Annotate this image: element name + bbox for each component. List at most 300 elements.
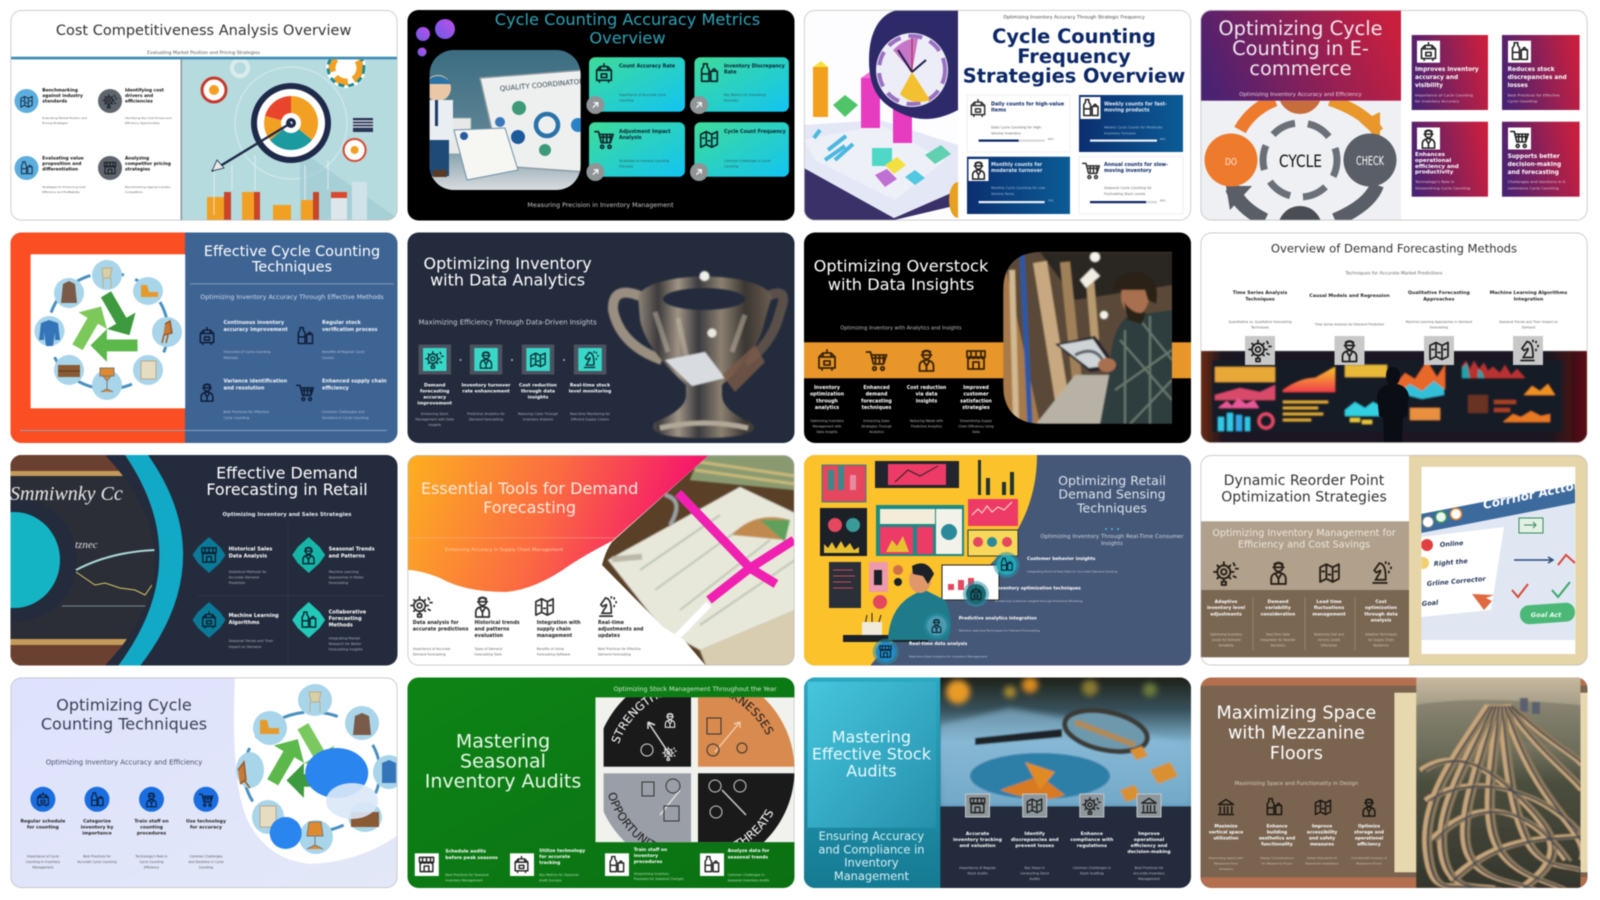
tool: real-time adjustments: Best Practices for Effective	[598, 647, 641, 651]
tool: real-time adjustments: Demand Forecasting	[598, 652, 631, 656]
title: Cycle Counting Accuracy Metrics	[495, 10, 760, 29]
cycle diagram	[1201, 100, 1401, 220]
card: Optimizing Overstock with Data Insights	[804, 232, 1192, 444]
method: causal models	[1309, 293, 1390, 365]
image: quality coordinator	[424, 50, 585, 190]
card: Optimizing Retail Demand Sensing Techniques	[804, 455, 1192, 666]
column: improve efficiency: decision-making	[1127, 849, 1171, 855]
step: demand forecasting accuracy: accuracy	[423, 394, 446, 400]
step: cost reduction: insights	[528, 394, 549, 400]
tool: real-time adjustments: updates	[598, 633, 620, 639]
method: machine learning: Machine Learning Algorithms	[1490, 291, 1567, 296]
column: accurate tracking: and valuation	[959, 843, 996, 849]
item: historical sales: Accurate Demand	[229, 576, 259, 580]
step: categorize inventory: inventory by	[81, 824, 113, 830]
item: machine learning: Impact on Demand	[229, 645, 261, 649]
tool: historical trends: Forecasting Tools	[474, 652, 502, 656]
brown block with columns: Decisions	[1271, 644, 1286, 648]
tile: count accuracy rate	[586, 57, 685, 114]
item: value proposition: Efficiency and Profitability	[42, 190, 80, 194]
brown block with columns: optimization	[1365, 605, 1397, 611]
title: Optimizing Cycle	[56, 696, 192, 715]
column: customer satisfaction	[958, 351, 994, 434]
title block	[1200, 10, 1401, 101]
brown block with columns: Variability	[1218, 644, 1234, 648]
tool: data analysis	[411, 597, 469, 656]
audit step: training: Streamlining Inventory	[634, 872, 669, 876]
column: accessibility: Safety Standards for	[1307, 856, 1337, 860]
title: Cycle Counting	[992, 25, 1156, 48]
step: inventory turnover: rate enhancement	[462, 388, 511, 394]
beige panel with corrective action UI: Online	[1439, 539, 1464, 549]
title: Dynamic Reorder Point	[1224, 473, 1384, 489]
method: time series: Quantitative vs. Qualitative Forecasting	[1228, 320, 1292, 324]
column: demand forecasting	[861, 352, 892, 434]
audit step: technology: tracking	[539, 860, 560, 866]
tile: adjustment impact analysis: Strategies to Improve Counting	[619, 159, 669, 163]
title block: Optimizing Inventory Accuracy and Efficiency	[1239, 92, 1363, 98]
step: stock monitoring: Real-time Monitoring for	[570, 412, 610, 416]
item: collaborative forecasting: Integrating Market	[329, 636, 360, 640]
item: value proposition: proposition and	[42, 161, 81, 167]
step: demand forecasting accuracy: Demand	[424, 384, 445, 388]
column: building aesthetics: Design Considerations	[1260, 856, 1294, 860]
brown block with columns: through data	[1364, 611, 1398, 617]
SWOT diagram: OPPORTUNITIES	[608, 792, 656, 843]
beige panel with corrective action UI: Right the	[1433, 557, 1469, 568]
column: enhance compliance: regulations	[1077, 843, 1107, 849]
step: train staff: counting	[140, 824, 163, 830]
item: variance identification: Variance identification	[224, 378, 287, 384]
tile: annual counts	[1079, 157, 1183, 214]
tile: weekly counts: moving products	[1104, 108, 1150, 114]
item: inventory optimization: Inventory optimization techniques	[995, 585, 1081, 591]
column: improve efficiency: efficiency and	[1131, 843, 1167, 849]
title: Forecasting in Retail	[206, 480, 368, 499]
tile: weekly counts: Weekly Cycle Counts for Moderate	[1104, 126, 1162, 130]
recycling ring illustration	[234, 677, 405, 864]
item: inventory optimization	[963, 581, 1083, 607]
item: cost drivers: Identifying Key Cost Drivers and	[125, 116, 172, 120]
brown block with columns: Levels for Demand	[1211, 638, 1241, 642]
tile: annual counts: Fluctuating Stock Levels	[1104, 192, 1146, 196]
item: collaborative forecasting: Forecasting	[329, 616, 362, 622]
tool: integration: Forecasting Software	[537, 652, 570, 656]
card: Maximizing Space with Mezzanine Floors	[1200, 677, 1588, 889]
tool: data analysis: Importance of Accurate	[413, 647, 450, 651]
column: demand forecasting: forecasting	[861, 398, 892, 404]
column: cost reduction: insights	[916, 398, 937, 404]
item: seasonal trends: Forecasting	[329, 581, 348, 585]
audit step: analysis: Seasonal Inventory Audits	[728, 879, 770, 883]
column: accessibility	[1305, 800, 1339, 866]
item: historical sales: Historical Sales	[229, 546, 272, 552]
item: stock verification: Regular stock	[322, 320, 361, 326]
tile: supports better decision-making: and forecasting	[1508, 170, 1559, 176]
tile: daily counts: Daily Cycle Counting for High-	[991, 126, 1042, 130]
tile: supports better decision-making: Challenges and Solutions in E-	[1508, 179, 1567, 184]
audit step: analysis: Analyze data for	[728, 849, 769, 854]
audit step: schedule	[415, 848, 498, 883]
column: storage efficiency: Mezzanine Floors	[1356, 862, 1382, 866]
step: regular schedule: Counting in Inventory	[26, 860, 60, 864]
item: predictive analytics: Predictive analytics integration	[959, 616, 1037, 622]
item: benchmarking: Benchmarking	[42, 88, 78, 94]
title: Inventory Audits	[425, 770, 581, 792]
column: demand forecasting: Analytics	[869, 430, 884, 434]
item: customer behavior: Customer behavior insights	[1027, 556, 1096, 562]
audit step: technology: Utilize technology	[539, 849, 585, 854]
title: Strategies Overview	[963, 64, 1185, 88]
method: time series: Techniques	[1250, 325, 1269, 329]
brown block with columns: Service Levels	[1318, 638, 1340, 642]
step: stock monitoring: level monitoring	[569, 388, 611, 394]
column: storage efficiency	[1351, 799, 1388, 866]
brown block with columns: adjustments	[1210, 611, 1242, 617]
tan block: Optimizing Inventory Management for	[1212, 528, 1396, 539]
subtitle: Evaluating Market Position and Pricing Strategies	[147, 50, 261, 56]
pink X	[678, 493, 794, 600]
cycle diagram: DO	[1225, 157, 1237, 168]
step: stock monitoring: Real-time stock	[570, 384, 610, 388]
subtitle: Insights	[1101, 541, 1123, 547]
step: train staff	[134, 787, 169, 870]
card: Dynamic Reorder Point Optimization Strategies	[1200, 455, 1589, 666]
item: variance identification: and resolution	[224, 385, 265, 391]
tile: inventory discrepancy rate: Key Metrics for Evaluating	[724, 93, 766, 97]
audit step: schedule: Inventory Management	[445, 879, 483, 883]
tile: adjustment impact analysis: Adjustment Impact	[619, 130, 671, 135]
brown block with columns: Cost	[1375, 600, 1387, 605]
tan block: Efficiency and Cost Savings	[1238, 540, 1370, 551]
column: cost reduction: Predictive Analytics	[911, 425, 942, 429]
brown block with columns: Balancing Cost and	[1314, 632, 1344, 636]
column: inventory optimization: Management with	[813, 425, 841, 429]
decorative dots	[1105, 528, 1119, 530]
brown block with columns: Integration for Reorder	[1260, 638, 1296, 642]
step: cost reduction: Reducing Costs Through	[518, 412, 558, 416]
tile: enhances operational efficiency: Technology's Role in	[1415, 179, 1454, 184]
column: inventory optimization: analytics	[815, 405, 839, 411]
step: regular schedule: Importance of Cycle	[27, 854, 59, 858]
column: vertical space: Solutions	[1219, 867, 1233, 871]
tool: integration: supply chain	[537, 626, 571, 632]
brown block with columns: Optimizing Inventory	[1210, 632, 1242, 636]
tile: improves inventory accuracy: visibility	[1415, 83, 1443, 89]
item: value proposition	[14, 156, 86, 194]
column: vertical space: Maximizing Space with	[1209, 856, 1243, 860]
audit step: schedule: Best Practices for Seasonal	[445, 873, 489, 877]
item: machine learning	[192, 602, 279, 649]
illustration: isometric clock and bars	[804, 10, 967, 221]
column: improve efficiency: Improve	[1138, 832, 1160, 837]
item: collaborative forecasting: Forecasting Insights	[329, 648, 363, 652]
column: vertical space: Maximize	[1214, 824, 1238, 830]
column: identify discrepancies: discrepancies and	[1011, 837, 1059, 843]
item: cost drivers: drivers and	[125, 93, 153, 99]
column: customer satisfaction: customer	[963, 392, 989, 398]
beige panel with corrective action UI	[1409, 455, 1589, 666]
column: storage efficiency: storage and	[1354, 830, 1384, 836]
tile: inventory discrepancy rate: Inventory Discrepancy	[724, 64, 785, 70]
item: collaborative forecasting: Methods	[329, 623, 353, 629]
tool: integration: Integration with	[537, 621, 581, 626]
column: customer satisfaction: Improved	[963, 386, 989, 391]
column: improve efficiency	[1127, 794, 1171, 881]
step: use technology: Common Challenges	[190, 854, 222, 858]
column: vertical space: utilization	[1213, 836, 1239, 842]
header rule	[10, 57, 398, 59]
item: real-time data: Real-time Data Analytics for Inventory Management	[909, 654, 988, 658]
title: Forecasting	[483, 498, 576, 517]
teal title panel	[804, 677, 940, 889]
item: seasonal trends: Seasonal Trends	[329, 546, 375, 552]
column: accurate tracking: inventory tracking	[953, 837, 1002, 843]
column: improve efficiency: Best Practices for	[1135, 866, 1163, 870]
title: Counting Techniques	[41, 714, 207, 733]
item: real-time data: Real-time data analysis	[909, 641, 968, 647]
method: causal models: Time Series Analysis for Demand Prediction	[1314, 322, 1384, 326]
item: stock verification: Benefits of Regular Cycle	[322, 350, 365, 354]
title: Maximizing Space	[1217, 703, 1376, 723]
item: continuous improvement: Overview of Cycle Counting	[224, 350, 271, 354]
item: historical sales: Statistical Methods for	[229, 570, 267, 574]
audit step: schedule: Schedule audits	[445, 850, 486, 854]
tile: daily counts: items	[991, 108, 1006, 114]
step: categorize inventory	[77, 787, 117, 864]
method: qualitative	[1406, 290, 1472, 365]
column: inventory optimization: optimization	[810, 392, 845, 398]
column: accessibility: Mezzanine Installation	[1305, 862, 1339, 866]
gradient blob header	[407, 455, 709, 592]
teal title panel: Effective Stock	[812, 745, 932, 764]
column: customer satisfaction: strategies	[962, 405, 990, 411]
audit step: technology: Key Metrics for Seasonal	[539, 873, 578, 877]
tile: adjustment impact analysis: Precision	[619, 165, 633, 169]
item: benchmarking: against industry	[42, 93, 83, 99]
item: stock verification: verification process	[322, 327, 378, 333]
tile: cycle count frequency	[690, 122, 789, 181]
column: enhance compliance: Common Challenges in	[1073, 866, 1111, 870]
tile: daily counts	[967, 95, 1070, 152]
item: variance identification	[201, 378, 288, 420]
tile: improves inventory accuracy: Importance of Cycle Counting	[1415, 92, 1473, 98]
step: train staff: Cycle Counting	[139, 860, 164, 864]
item: predictive analytics: Machine Learning Techniques for Demand Forecasting	[959, 629, 1040, 633]
cycle diagram: CYCLE	[1279, 152, 1322, 172]
tool: historical trends	[474, 597, 520, 656]
tool: historical trends: evaluation	[474, 633, 504, 639]
column: cost reduction: Reducing Waste with	[910, 419, 943, 423]
column: customer satisfaction: Streamlining Supply	[960, 419, 992, 423]
eyebrow: Optimizing Inventory Accuracy Through Strategic Frequency	[1003, 15, 1145, 21]
tile: supports better decision-making: commerce Cycle Counting	[1508, 185, 1559, 190]
column: cost reduction: via data	[916, 392, 937, 398]
tile: inventory discrepancy rate: Rate	[724, 70, 737, 76]
tile: supports better decision-making: Supports better	[1508, 154, 1560, 160]
column: accurate tracking: Stock Audits	[967, 872, 988, 876]
caption: Measuring Precision in Inventory Management	[527, 202, 674, 209]
image: quality coordinator: QUALITY COORDINATOR	[499, 78, 585, 93]
teal title panel: and Compliance in	[818, 842, 924, 856]
tile: count accuracy rate: Counting	[619, 99, 633, 103]
tool: data analysis: Data analysis for	[413, 621, 459, 626]
tile: supports better decision-making: decision-making	[1508, 162, 1561, 168]
step: cost reduction: Inventory Analysis	[523, 418, 553, 422]
column: accurate tracking	[953, 794, 1002, 876]
column: storage efficiency: Optimize	[1358, 824, 1380, 830]
title block: commerce	[1249, 57, 1352, 80]
photo: ledger and chart	[600, 455, 795, 666]
item: historical sales: Data Analysis	[229, 553, 267, 559]
step: inventory turnover: Inventory turnover	[461, 384, 511, 388]
tile: weekly counts	[1079, 95, 1183, 152]
column: accurate tracking: Importance of Regular	[959, 866, 996, 870]
brown block with columns: Adaptive	[1215, 600, 1237, 605]
column: storage efficiency: Cost-Benefit Analysis of	[1351, 856, 1387, 860]
subtitle: Optimizing Stock Management Throughout the Year	[613, 686, 777, 693]
audit step: training: procedures	[634, 859, 663, 865]
brown block with columns: variability	[1265, 605, 1291, 611]
item: competitor pricing: Benchmarking Against Industry	[125, 185, 171, 189]
tile: monthly counts: 70%	[1048, 198, 1054, 202]
tool: integration	[536, 599, 581, 656]
title: with Data Analytics	[430, 271, 585, 290]
step: categorize inventory: Accurate Cycle Counting	[77, 860, 117, 864]
item: machine learning: Seasonal Trends and Their	[229, 639, 273, 643]
brown block with columns: Demand	[1268, 600, 1288, 605]
method: qualitative: Qualitative Forecasting	[1408, 291, 1470, 296]
tile: annual counts: Seasonal Cycle Counting for	[1104, 186, 1152, 190]
brown block with columns	[1200, 590, 1409, 657]
item: cost drivers	[98, 88, 172, 125]
tile: monthly counts	[967, 157, 1070, 214]
item: seasonal trends	[292, 537, 375, 585]
item: supply chain efficiency: efficiency	[322, 385, 350, 391]
tile: reduces stock discrepancies: Best Practices for Effective	[1508, 92, 1560, 98]
brown block with columns: Lead time	[1316, 600, 1342, 605]
column: accessibility: measures	[1310, 842, 1334, 848]
subtitle: Optimizing Inventory Accuracy Through Effective Methods	[200, 294, 384, 301]
yellow illustration panel	[804, 455, 1037, 666]
step: train staff: Technology's Role in	[135, 854, 168, 858]
SWOT diagram	[594, 696, 796, 844]
beige panel with corrective action UI: Grline Corrector	[1426, 575, 1487, 588]
item: seasonal trends: and Patterns	[329, 553, 365, 559]
method: machine learning: Seasonal Trends and Their Impact on	[1499, 320, 1558, 324]
item: real-time data	[873, 639, 988, 665]
step: demand forecasting accuracy: forecasting	[420, 388, 449, 394]
column: building aesthetics: aesthetics and	[1259, 836, 1295, 842]
brown block with columns: fluctuations	[1314, 605, 1344, 611]
item: variance identification: Best Practices for Effective	[224, 410, 269, 414]
tile: weekly counts: Weekly counts for fast-	[1104, 102, 1167, 108]
tile: enhances operational efficiency: efficiency and	[1415, 164, 1459, 170]
item: supply chain efficiency: Enhanced supply chain	[322, 378, 387, 384]
decorative purple circles	[416, 19, 455, 56]
tile: annual counts: Annual counts for slow-	[1104, 163, 1168, 168]
tile: improves inventory accuracy: Improves inventory	[1415, 67, 1479, 73]
tile: enhances operational efficiency: Streamlining Cycle Counting	[1415, 185, 1471, 190]
title: Mastering	[456, 730, 550, 752]
column: cost reduction: Cost reduction	[907, 386, 946, 391]
brown block with columns: for Supply Chain	[1368, 638, 1394, 642]
tile: inventory discrepancy rate	[690, 57, 789, 114]
column: customer satisfaction: satisfaction	[960, 398, 992, 404]
column: customer satisfaction: Data	[972, 430, 980, 434]
column: identify discrepancies: prevent losses	[1015, 843, 1054, 849]
chalkboard image: tznec	[75, 539, 98, 551]
tile: improves inventory accuracy: accuracy and	[1415, 75, 1458, 81]
audit step: technology: for accurate	[539, 854, 570, 860]
step: demand forecasting accuracy: improvement	[417, 400, 453, 406]
tile: enhances operational efficiency	[1412, 122, 1488, 197]
title: Effective Cycle Counting	[204, 244, 380, 260]
tile: enhances operational efficiency: productivity	[1415, 170, 1454, 176]
audit step: technology: Audit Success	[539, 879, 562, 883]
item: supply chain efficiency: Common Challenges and	[322, 410, 365, 414]
step: categorize inventory: importance	[82, 831, 112, 837]
tool: real-time adjustments: adjustments and	[598, 626, 644, 632]
tile: cycle count frequency: Cycle Count Frequency	[724, 129, 787, 135]
step: stock monitoring	[569, 344, 611, 422]
audit step: analysis: Common Challenges in	[728, 873, 764, 877]
column: identify discrepancies: Identify	[1024, 832, 1045, 837]
item: customer behavior	[994, 552, 1117, 578]
brown block with columns: consideration	[1261, 611, 1295, 617]
title: Optimizing Retail	[1058, 473, 1166, 488]
step: inventory turnover: Predictive Analytics for	[467, 412, 505, 416]
column: building aesthetics: building	[1267, 830, 1287, 836]
item: value proposition: Strategies for Enhancing Cost	[42, 185, 85, 189]
title: Optimizing Overstock	[814, 257, 988, 276]
column: demand forecasting: Strategies Through	[861, 425, 892, 429]
tile: monthly counts: moderate turnover	[991, 168, 1043, 174]
step: categorize inventory: Categorize	[83, 819, 111, 824]
teal title panel: Mastering	[832, 728, 911, 747]
photo: magnifier on charts	[940, 677, 1192, 807]
subtitle: Optimizing Inventory with Analytics and Insights	[840, 325, 962, 331]
card: Cycle Counting Accuracy Metrics Overview	[408, 10, 794, 221]
card: Effective Demand Forecasting in Retail	[0, 455, 398, 666]
column: inventory optimization: through	[816, 398, 838, 404]
method: machine learning	[1490, 290, 1568, 365]
tile: cycle count frequency: Counting	[724, 165, 738, 169]
card: Overview of Demand Forecasting Methods	[1200, 232, 1588, 444]
orange panel with recycling ring	[10, 232, 185, 444]
column: identify discrepancies: Audits	[1030, 877, 1040, 881]
subtitle: Enhancing Accuracy in Supply Chain Management	[445, 547, 563, 553]
item: seasonal trends: Machine Learning	[329, 570, 359, 574]
beige panel with corrective action UI: Corrfior Actton	[1482, 477, 1583, 512]
column: enhance compliance: Enhance	[1081, 832, 1103, 837]
step: train staff: Efficiency	[144, 866, 159, 870]
card: Mastering Seasonal Inventory Audits	[406, 676, 796, 889]
tile: improves inventory accuracy: for Inventory Accuracy	[1415, 98, 1460, 104]
item: seasonal trends: Approaches in Retail	[329, 576, 363, 580]
beige panel with corrective action UI: Goal	[1421, 599, 1439, 608]
brown block with columns: Real-Time Data	[1266, 632, 1290, 636]
subtitle: Optimizing Inventory Accuracy and Efficiency	[46, 758, 202, 766]
audit step: analysis: seasonal trends	[728, 855, 768, 861]
step: use technology: and Solutions in Cycle	[188, 860, 224, 864]
column: storage efficiency: efficiency	[1357, 842, 1381, 848]
orange band	[804, 342, 1192, 378]
column: accurate tracking: Accurate	[966, 832, 989, 837]
step: use technology	[186, 787, 226, 870]
audit step: training: Processes for Seasonal Changes	[634, 877, 684, 881]
column: building aesthetics	[1259, 799, 1295, 866]
